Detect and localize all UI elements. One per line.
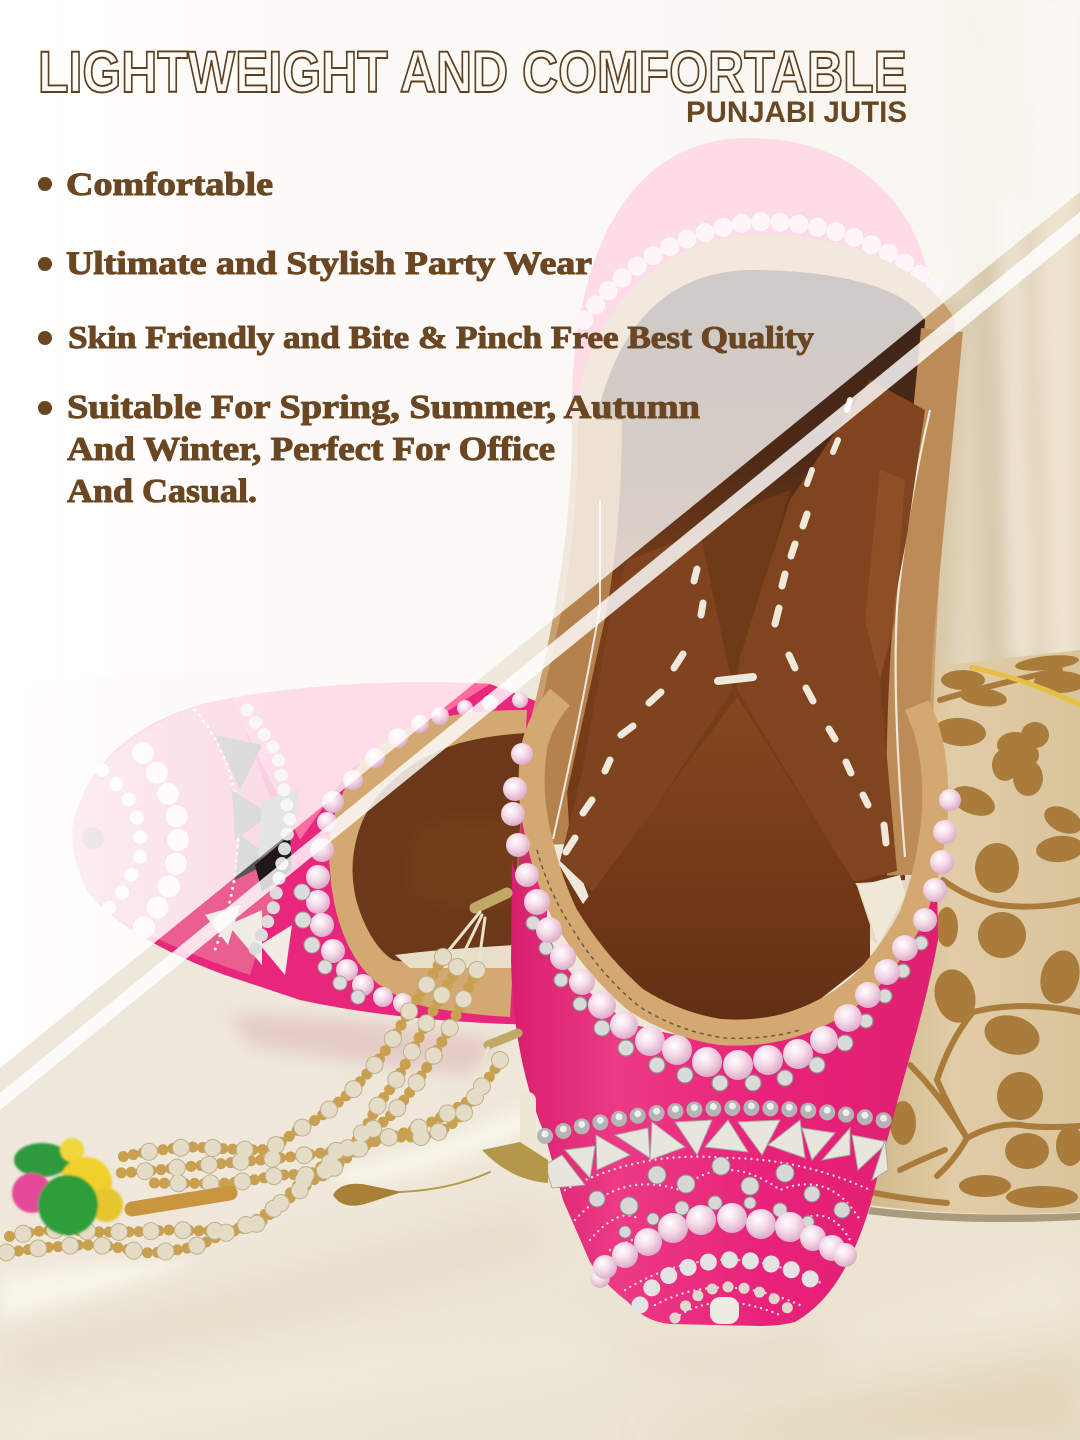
bullet: party wear: Ultimate and Stylish Party Wear: [66, 246, 592, 282]
bullet: all seasons: [38, 389, 700, 510]
embroidered gold cushion: [868, 650, 1080, 1222]
toe rhinestone band: [545, 1106, 893, 1136]
bullet: comfortable: Comfortable: [66, 167, 273, 203]
mouth pearl row: [501, 743, 961, 1080]
gold cord: [132, 1193, 230, 1209]
left shoe rhinestones: [294, 884, 365, 1004]
tan heel band: [528, 235, 955, 730]
heel stitches: [807, 400, 850, 484]
main shoe, upright: [501, 138, 961, 1326]
left shoe rim and lining: [329, 710, 527, 1017]
insole footbed: [550, 697, 870, 1030]
left shoe embroidered toe: [72, 698, 300, 975]
feature bullet list: [38, 167, 814, 510]
toe inner beads and centre stone: [675, 1287, 790, 1324]
interior lining: [540, 270, 925, 900]
left flap: [560, 532, 733, 896]
gold seed beads: [0, 957, 500, 1253]
right flap: [737, 380, 925, 882]
gold drop thread: [400, 1172, 490, 1192]
cushion embroidery stems: [870, 670, 1080, 1203]
mouth rhinestones: [526, 916, 928, 1091]
left shoe: [72, 682, 560, 1025]
heel pearl trim: [584, 222, 948, 320]
heel counter pink: [572, 138, 958, 720]
cushion embroidery leaves: [890, 653, 1080, 1208]
rim stitching: [537, 850, 800, 1038]
photo background: satin floor: [0, 672, 1080, 1440]
subtitle: PUNJABI JUTIS: [686, 96, 907, 129]
gold drop bead: [333, 1184, 402, 1206]
sock fuzz: [858, 875, 905, 945]
pearl shadows: [0, 957, 500, 1253]
colourful pom tassel: [12, 1138, 123, 1235]
stitches: [566, 514, 886, 852]
yellow yarn: [970, 667, 1080, 705]
cream cord and gold mesh ties: [445, 893, 528, 1143]
centre wedge: [690, 490, 790, 690]
left shoe body: [74, 682, 560, 1025]
bullet: all seasons: And Casual.: [67, 473, 257, 510]
gold tassel: [482, 1142, 548, 1183]
left shoe heel highlight: [230, 682, 490, 840]
tan mouth rim: [532, 697, 935, 1033]
pink vamp: [511, 860, 938, 1326]
bullet: skin friendly: Skin Friendly and Bite & Pinch Free Best Quality: [68, 319, 814, 355]
white diagonal overlay panel: [0, 0, 1080, 1068]
left shoe pearl ring: [306, 692, 528, 1013]
bullet: all seasons: Suitable For Spring, Summer, Autumn: [67, 389, 700, 426]
toe crystal arc: [640, 1260, 825, 1305]
toe dotted scrollwork: [565, 1157, 870, 1315]
cushion shadow line: [868, 1207, 1080, 1222]
pearls: [0, 957, 500, 1253]
toe pearl arc: [590, 1203, 857, 1288]
side tan lining strips: [545, 330, 942, 875]
toe stones: [589, 1157, 850, 1238]
bead strands: [0, 957, 500, 1253]
bullet: all seasons: And Winter, Perfect For Office: [67, 431, 555, 468]
white diagonal stripe: [0, 212, 1080, 1110]
toe mirror triangles: [545, 1120, 888, 1188]
title: LIGHTWEIGHT AND COMFORTABLE: [38, 40, 907, 105]
insole flaps: [560, 380, 925, 896]
